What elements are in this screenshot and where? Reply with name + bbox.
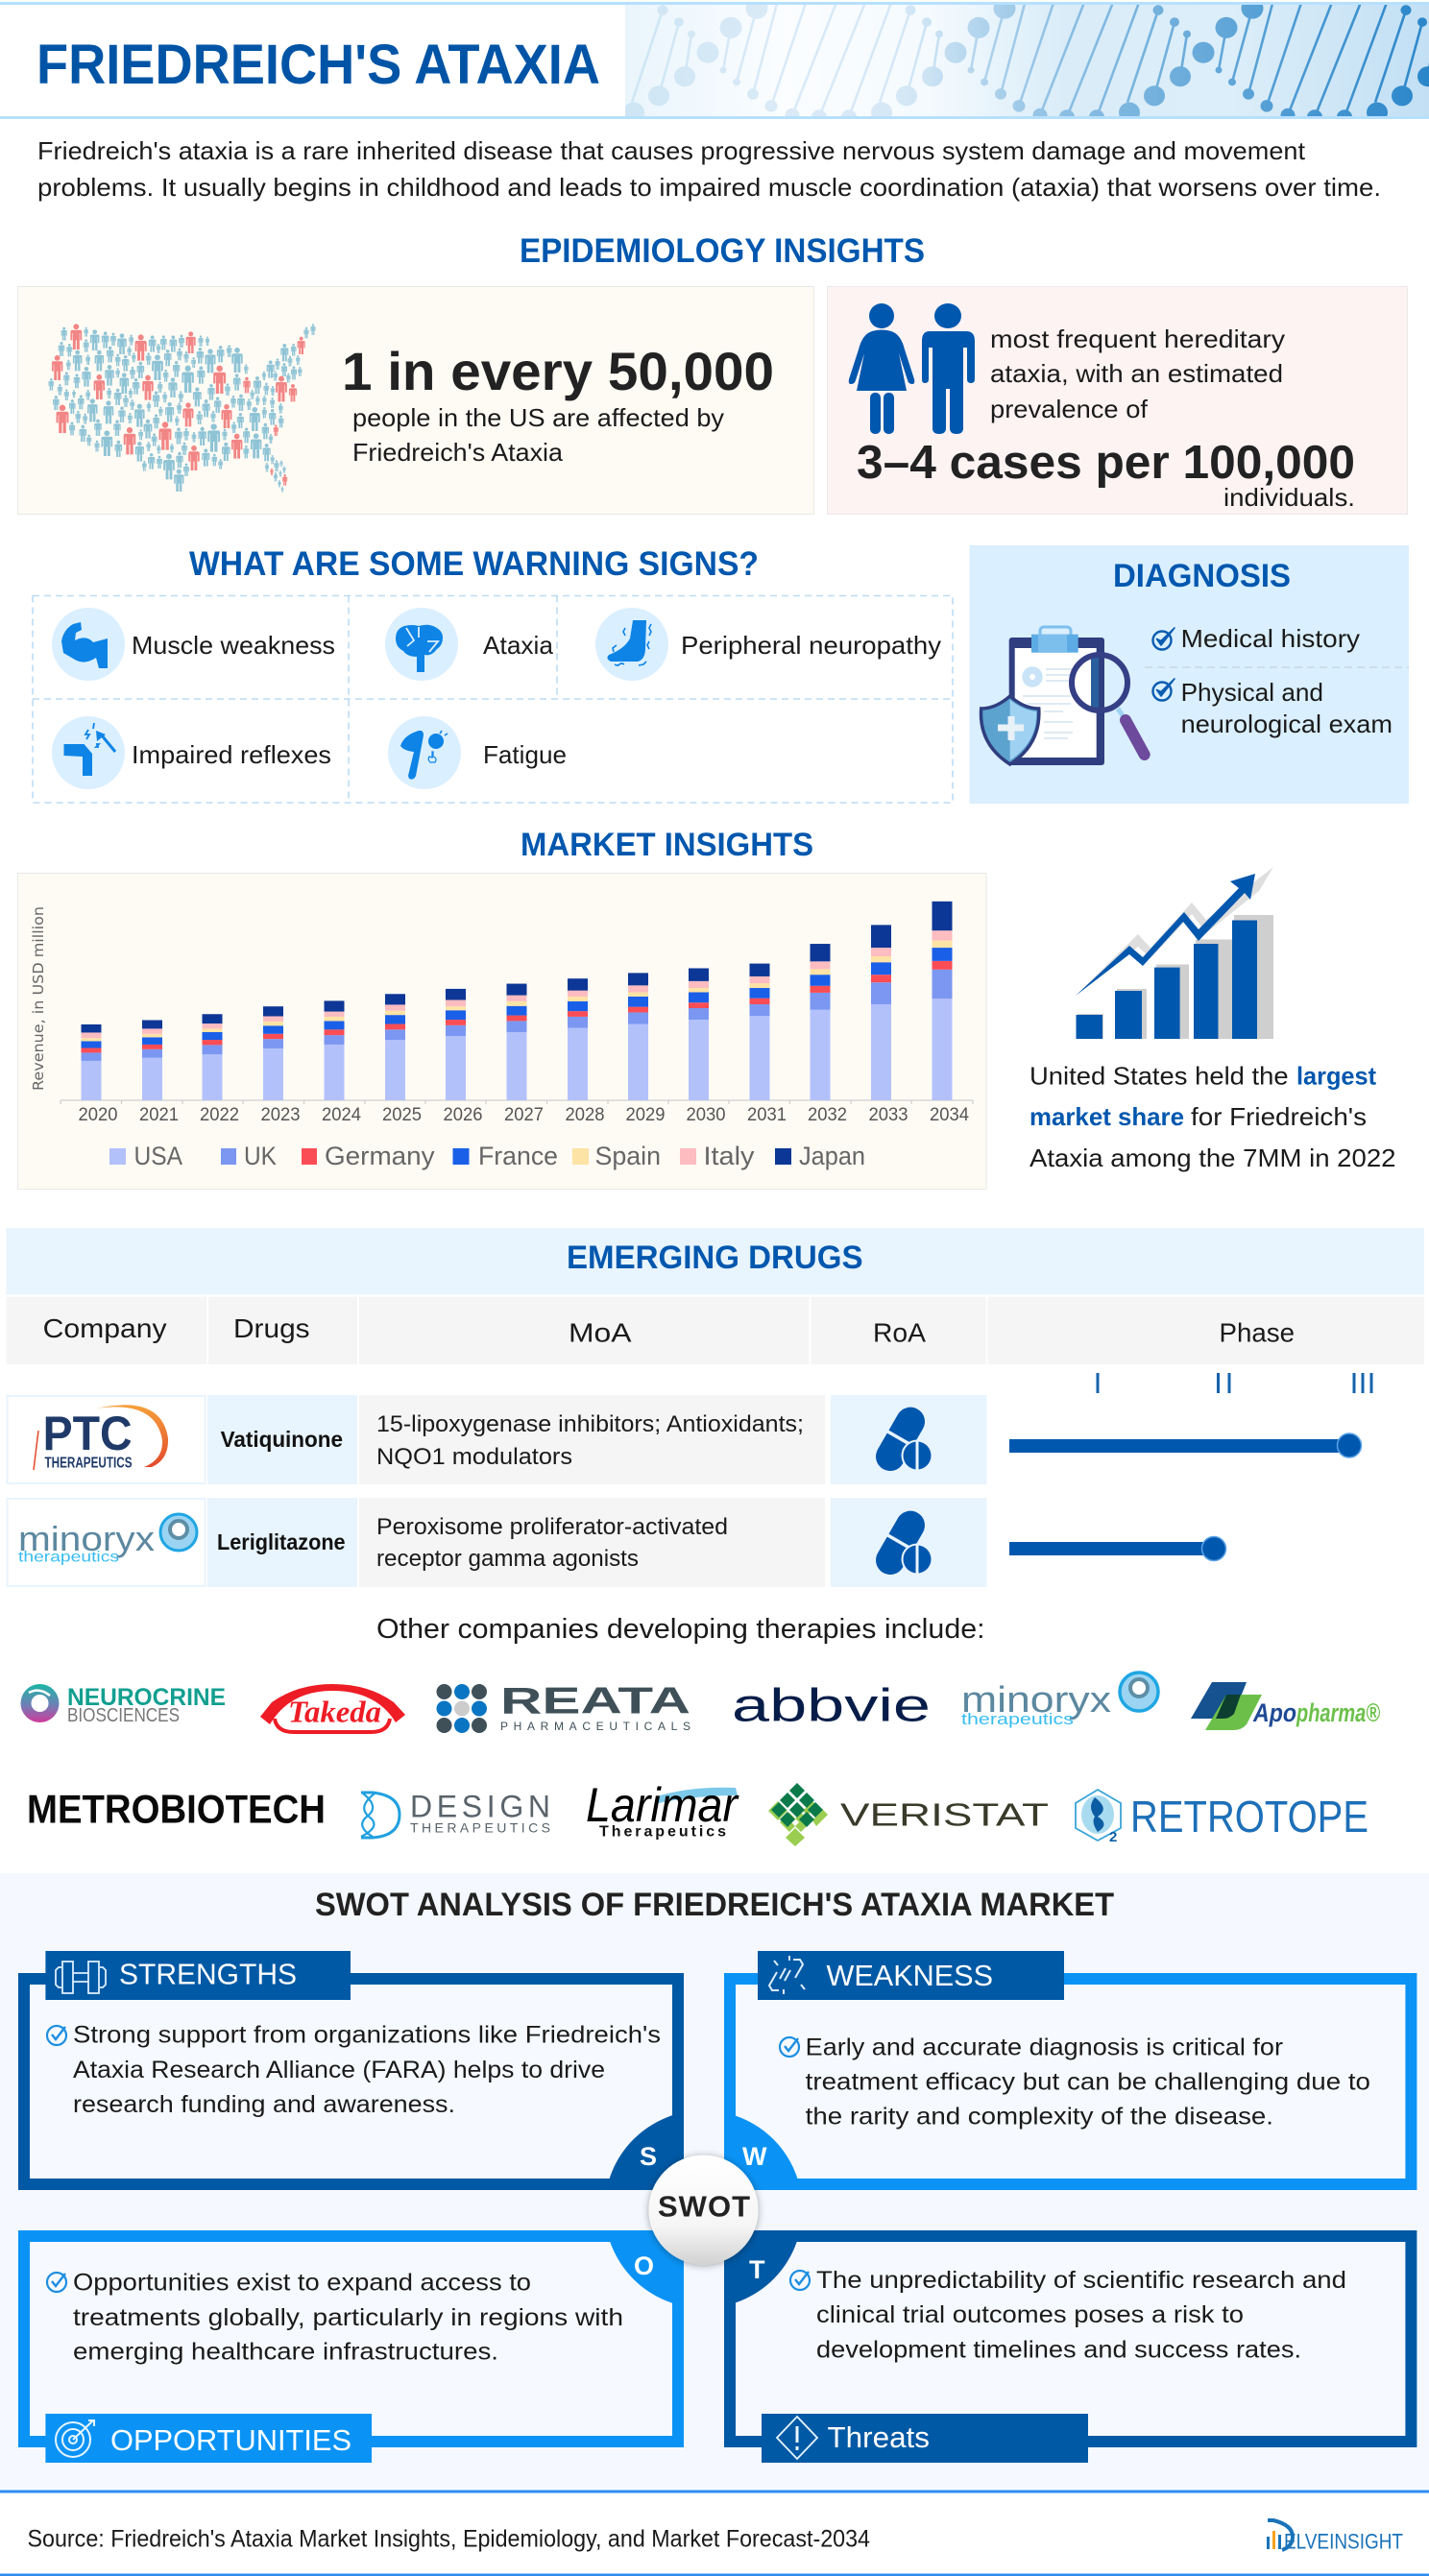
intro text <box>37 136 1381 202</box>
logo: Design Therapeutics: DESIGN <box>410 1790 550 1824</box>
logo: Design Therapeutics: THERAPEUTICS <box>410 1820 550 1836</box>
header banner <box>0 0 1429 125</box>
market share callout: Ataxia among the 7MM in 2022 <box>1029 1144 1396 1172</box>
tab: threats <box>762 2414 1088 2463</box>
opportunities text <box>47 2270 623 2366</box>
box: weakness <box>724 1951 1417 2190</box>
stacked bar chart <box>81 902 953 1100</box>
weakness text: the rarity and complexity of the disease. <box>806 2104 1273 2131</box>
logo: Minoryx Therapeutics: minoryx <box>18 1519 155 1558</box>
weakness text: Early and accurate diagnosis is critical for <box>806 2034 1283 2061</box>
icon: oral pills <box>868 1505 933 1581</box>
strengths text: research funding and awareness. <box>73 2091 455 2118</box>
panel: diagnosis <box>970 545 1409 804</box>
strengths text: Ataxia Research Alliance (FARA) helps to drive <box>73 2057 605 2083</box>
chart year labels: 2030 <box>686 1105 726 1125</box>
chart year labels: 2024 <box>322 1105 361 1125</box>
logo: Neurocrine Biosciences: NEUROCRINE <box>67 1684 226 1711</box>
text: other companies: Other companies developing therapies include: <box>376 1614 985 1645</box>
market share callout: for Friedreich's <box>1191 1102 1367 1131</box>
panel: warning signs <box>33 595 953 803</box>
box: threats <box>724 2230 1417 2463</box>
statistic caption: individuals: individuals. <box>1223 483 1355 512</box>
heading: diagnosis: DIAGNOSIS <box>1113 558 1291 594</box>
logo: AbbVie: abbvie <box>732 1681 931 1732</box>
chart year labels <box>79 1105 969 1125</box>
decorative DNA banner image <box>625 5 1429 116</box>
strengths text: Strong support from organizations like Friedreich's <box>73 2022 661 2049</box>
market share callout: largest <box>1296 1062 1376 1091</box>
chart year labels: 2025 <box>382 1105 422 1125</box>
warning sign: fatigue: Fatigue <box>483 740 567 769</box>
warning sign: impaired reflexes: Impaired reflexes <box>132 740 331 769</box>
logo: Apopharma <box>1191 1682 1380 1730</box>
chart axis <box>61 1100 973 1104</box>
chart legend: Japan <box>799 1142 865 1170</box>
panel: prevalence <box>828 286 1408 515</box>
table header row: RoA <box>873 1317 926 1348</box>
row: Leriglitazone <box>8 1498 1226 1587</box>
logo: PTC Therapeutics <box>34 1405 168 1472</box>
icon: oral pills <box>868 1401 933 1478</box>
market share callout <box>1029 1062 1396 1172</box>
tab: strengths <box>45 1951 351 2000</box>
logo: Reata Pharmaceuticals: REATA <box>500 1680 690 1722</box>
statistic caption: people in the US are affected by <box>352 403 724 432</box>
heading: warning signs: WHAT ARE SOME WARNING SIGNS? <box>189 545 759 583</box>
warning sign: impaired reflexes <box>52 716 331 789</box>
chart year labels: 2028 <box>565 1105 605 1125</box>
panel: market chart <box>17 874 986 1189</box>
table header row: Phase <box>1220 1317 1295 1348</box>
logo: Minoryx Therapeutics: therapeutics <box>18 1550 119 1565</box>
intro text: problems. It usually begins in childhood and leads to impaired muscle coordination (ataxia) that worsens over time. <box>37 173 1381 202</box>
source text: Source: Friedreich's Ataxia Market Insights, Epidemiology, and Market Forecast-2034 <box>27 2526 870 2553</box>
row: Leriglitazone: Leriglitazone <box>217 1529 346 1554</box>
logo: PTC Therapeutics: PTC <box>43 1407 133 1460</box>
chart legend: France <box>478 1142 558 1170</box>
heading: market insights: MARKET INSIGHTS <box>521 827 813 863</box>
heading: epidemiology insights: EPIDEMIOLOGY INSIGHTS <box>520 232 925 270</box>
opportunities text: Opportunities exist to expand access to <box>73 2270 531 2297</box>
box: opportunities <box>18 2230 684 2463</box>
logo: Apopharma: Apo <box>1252 1698 1296 1727</box>
diagnosis item: physical and neurological exam: neurological exam <box>1181 710 1393 738</box>
chart legend: Italy <box>703 1142 755 1170</box>
logo: Retrotope: RETROTOPE <box>1130 1792 1368 1842</box>
chart year labels: 2023 <box>261 1105 300 1125</box>
threats text: clinical trial outcomes poses a risk to <box>816 2301 1244 2328</box>
weakness text: treatment efficacy but can be challenging due to <box>806 2069 1370 2096</box>
row: Leriglitazone: Peroxisome proliferator-activated <box>376 1514 728 1540</box>
chart year labels: 2032 <box>808 1105 847 1125</box>
logo: Neurocrine Biosciences <box>21 1684 226 1726</box>
table header row: MoA <box>569 1317 632 1348</box>
chart year labels: 2029 <box>626 1105 665 1125</box>
logo: Minoryx Therapeutics <box>18 1514 197 1565</box>
logo: Apopharma: pharma® <box>1296 1698 1380 1727</box>
tab: opportunities <box>45 2414 372 2463</box>
chart legend <box>109 1142 865 1170</box>
logo: Minoryx Therapeutics <box>961 1673 1158 1728</box>
threats text: The unpredictability of scientific research and <box>816 2267 1346 2294</box>
panel: SWOT analysis <box>0 1873 1429 2490</box>
SWOT centre circle: SWOT <box>658 2190 750 2224</box>
SWOT centre circle <box>649 2155 759 2265</box>
footer <box>0 2491 1429 2576</box>
logo: Minoryx Therapeutics: minoryx <box>961 1680 1111 1721</box>
chart y-axis label: Revenue, in USD million <box>30 906 47 1091</box>
logo: Retrotope: 2 <box>1109 1829 1117 1845</box>
heading: emerging drugs: EMERGING DRUGS <box>567 1240 862 1276</box>
panel: emerging drugs table <box>7 1228 1424 1587</box>
chart legend: UK <box>244 1142 277 1170</box>
row: Vatiquinone <box>8 1395 1362 1484</box>
intro text: Friedreich's ataxia is a rare inherited disease that causes progressive nervous system damage and movement <box>37 136 1306 165</box>
logos: other companies <box>21 1673 1380 1846</box>
logo: Larimar Therapeutics: Larimar <box>586 1778 739 1832</box>
heading: emerging drugs <box>7 1228 1424 1294</box>
logo: Larimar Therapeutics: Therapeutics <box>599 1824 726 1841</box>
market share callout: United States held the <box>1029 1062 1289 1091</box>
logo: DelveInsight <box>1267 2520 1403 2554</box>
logo: MetroBiotech: METROBIOTECH <box>27 1786 326 1831</box>
opportunities text: emerging healthcare infrastructures. <box>73 2339 498 2366</box>
strengths text <box>47 2022 661 2118</box>
table header row <box>7 1295 1424 1364</box>
weakness text <box>780 2034 1370 2131</box>
warning sign: ataxia: Ataxia <box>483 631 554 660</box>
row: Vatiquinone: 15-lipoxygenase inhibitors; Antioxidants; <box>376 1411 804 1437</box>
warning sign: ataxia <box>385 608 554 681</box>
warning sign: fatigue <box>388 716 567 789</box>
chart legend: Germany <box>325 1142 435 1170</box>
chart year labels: 2033 <box>868 1105 908 1125</box>
title: FRIEDREICH'S ATAXIA <box>36 34 600 96</box>
statistic: 1 in every 50,000: 1 in every 50,000 <box>342 341 774 401</box>
logo: DelveInsight: ELVEINSIGHT <box>1284 2529 1403 2554</box>
icon: clipboard, shield, magnifier <box>981 627 1145 765</box>
panel: US prevalence <box>17 286 814 515</box>
chart year labels: 2022 <box>200 1105 239 1125</box>
prevalence description: prevalence of <box>990 395 1149 423</box>
prevalence description: ataxia, with an estimated <box>990 359 1283 388</box>
prevalence description <box>990 325 1285 423</box>
phase bar: phase III <box>1009 1433 1362 1457</box>
heading: SWOT analysis: SWOT ANALYSIS OF FRIEDREICH'S ATAXIA MARKET <box>315 1887 1114 1923</box>
chart year labels: 2026 <box>444 1105 482 1125</box>
statistic caption: Friedreich's Ataxia <box>352 438 564 467</box>
logo: Reata Pharmaceuticals <box>436 1680 690 1733</box>
icon: US map of people <box>49 324 316 493</box>
warning sign: peripheral neuropathy <box>595 608 941 681</box>
row: Vatiquinone: Vatiquinone <box>221 1427 343 1452</box>
phase bar: phase II <box>1009 1536 1225 1561</box>
chart legend: Spain <box>595 1142 661 1170</box>
diagnosis item: medical history: Medical history <box>1181 624 1360 653</box>
diagnosis item: physical and neurological exam <box>1152 678 1393 738</box>
logo: Veristat: VERISTAT <box>840 1797 1049 1832</box>
diagnosis item: physical and neurological exam: Physical and <box>1181 678 1323 707</box>
row: Leriglitazone: receptor gamma agonists <box>376 1546 639 1572</box>
logo: Takeda <box>260 1684 405 1732</box>
logo: PTC Therapeutics: THERAPEUTICS <box>44 1456 133 1472</box>
chart year labels: 2021 <box>139 1105 179 1125</box>
logo: Design Therapeutics <box>361 1790 550 1838</box>
warning sign: peripheral neuropathy: Peripheral neuropathy <box>681 631 941 660</box>
prevalence description: most frequent hereditary <box>990 325 1285 353</box>
market share callout: market share <box>1029 1102 1184 1131</box>
logo: Minoryx Therapeutics: therapeutics <box>961 1710 1074 1728</box>
logo: Takeda: Takeda <box>288 1694 381 1728</box>
row: Vatiquinone: NQO1 modulators <box>376 1444 572 1470</box>
logo: Neurocrine Biosciences: BIOSCIENCES <box>67 1705 180 1726</box>
table header row: Company <box>43 1313 167 1343</box>
phase markers I II III <box>1098 1373 1371 1393</box>
warning sign: muscle weakness: Muscle weakness <box>132 631 335 660</box>
icon: growth bars and arrow <box>1076 867 1273 1039</box>
letter O: O <box>634 2251 654 2280</box>
table header row: Drugs <box>233 1313 310 1343</box>
chart year labels: 2027 <box>504 1105 544 1125</box>
threats text <box>790 2267 1346 2363</box>
warning sign: muscle weakness <box>52 608 335 681</box>
tab: opportunities: OPPORTUNITIES <box>110 2423 351 2457</box>
chart year labels: 2034 <box>930 1105 969 1125</box>
chart year labels: 2020 <box>79 1105 117 1125</box>
letter W: W <box>742 2142 767 2171</box>
chart year labels: 2031 <box>747 1105 787 1125</box>
icon: woman and man figures <box>849 303 975 434</box>
logo: Retrotope <box>1076 1790 1368 1845</box>
logo: Veristat <box>768 1783 1049 1846</box>
letter T: T <box>749 2255 765 2284</box>
statistic: 3-4 cases per 100,000: 3–4 cases per 100,000 <box>857 437 1355 489</box>
statistic caption <box>352 403 724 467</box>
letter S: S <box>640 2142 657 2171</box>
tab: threats: Threats <box>828 2420 930 2454</box>
opportunities text: treatments globally, particularly in regions with <box>73 2304 623 2331</box>
tab: weakness: WEAKNESS <box>826 1959 993 1992</box>
tab: strengths: STRENGTHS <box>119 1957 297 1990</box>
box: strengths <box>18 1951 684 2190</box>
threats text: development timelines and success rates. <box>816 2336 1301 2363</box>
logo: Reata Pharmaceuticals: PHARMACEUTICALS <box>500 1720 690 1733</box>
tab: weakness <box>758 1951 1064 2000</box>
chart legend: USA <box>134 1142 182 1170</box>
